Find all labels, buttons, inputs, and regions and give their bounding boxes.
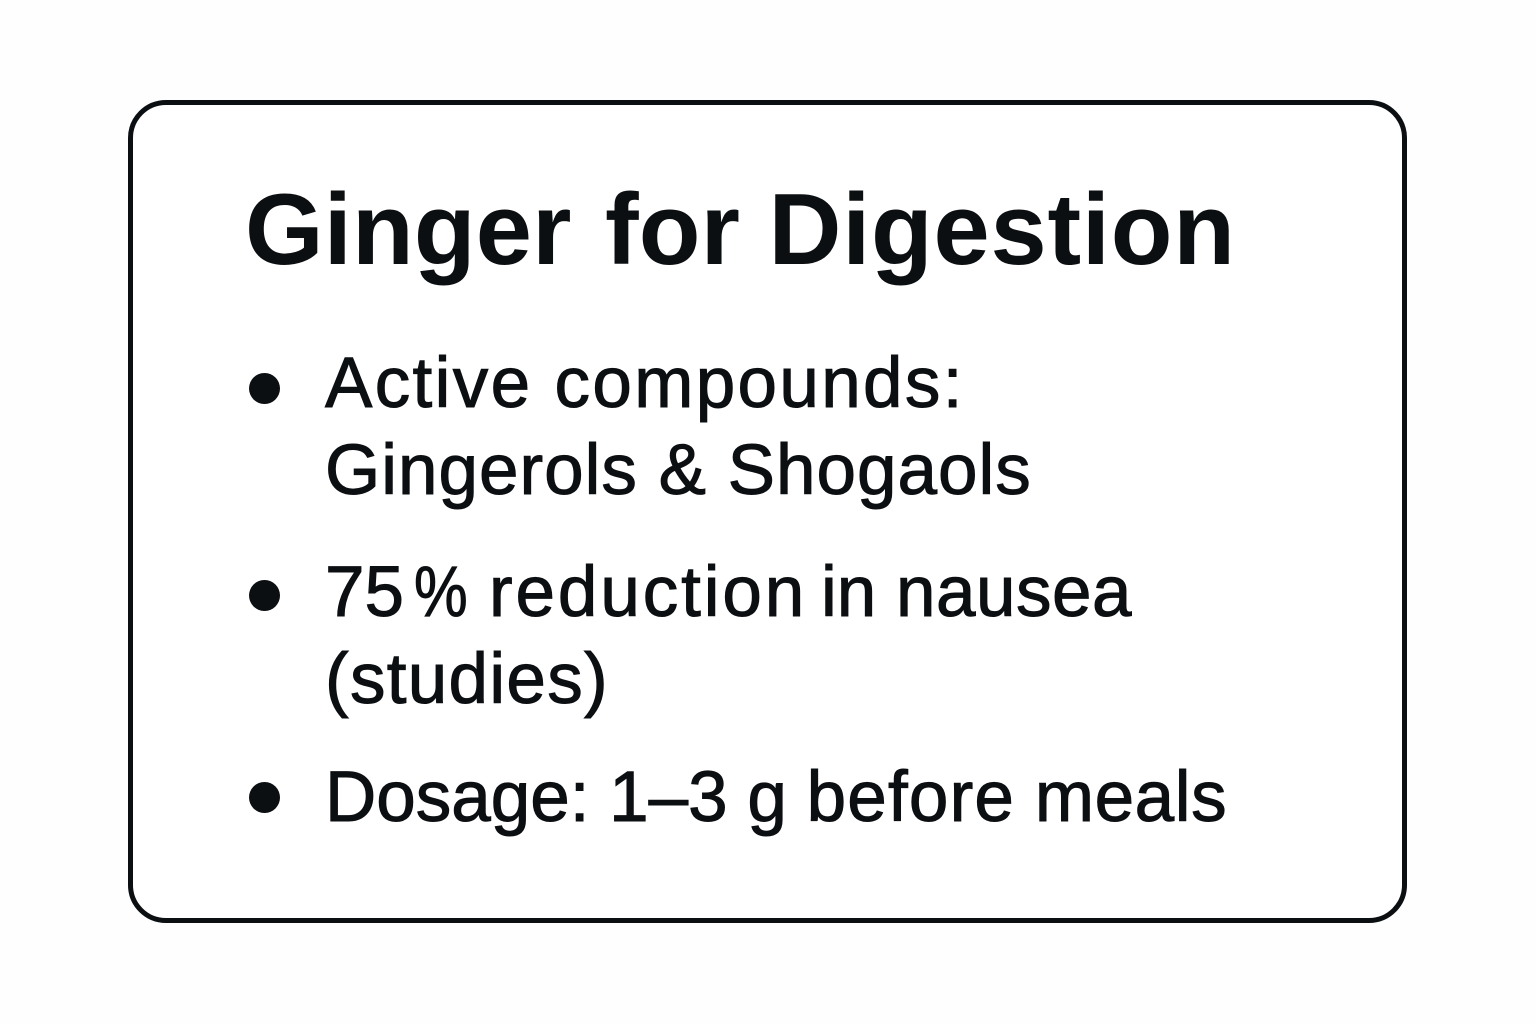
text: active compounds: Gingerols & Shogaols [325, 431, 1032, 510]
text: nausea reduction: % [414, 553, 468, 632]
text: nausea reduction: (studies) [325, 640, 609, 719]
text: active compounds: Active compounds: [325, 344, 965, 423]
panel: ginger card [128, 100, 1407, 923]
icon: bullet 3 [249, 782, 280, 813]
text: nausea reduction: reduction [489, 553, 807, 632]
text: nausea reduction: nausea [896, 553, 1132, 632]
icon: bullet 1 [249, 373, 280, 404]
text: nausea reduction [325, 553, 1132, 719]
text: active compounds [324, 344, 1032, 510]
icon: bullet 2 [249, 580, 280, 611]
text: dosage: Dosage: 1–3 g before meals [325, 758, 1227, 837]
text: nausea reduction: 75 [325, 553, 404, 632]
text: nausea reduction: in [821, 553, 876, 632]
title: Ginger for Digestion [245, 174, 1236, 286]
